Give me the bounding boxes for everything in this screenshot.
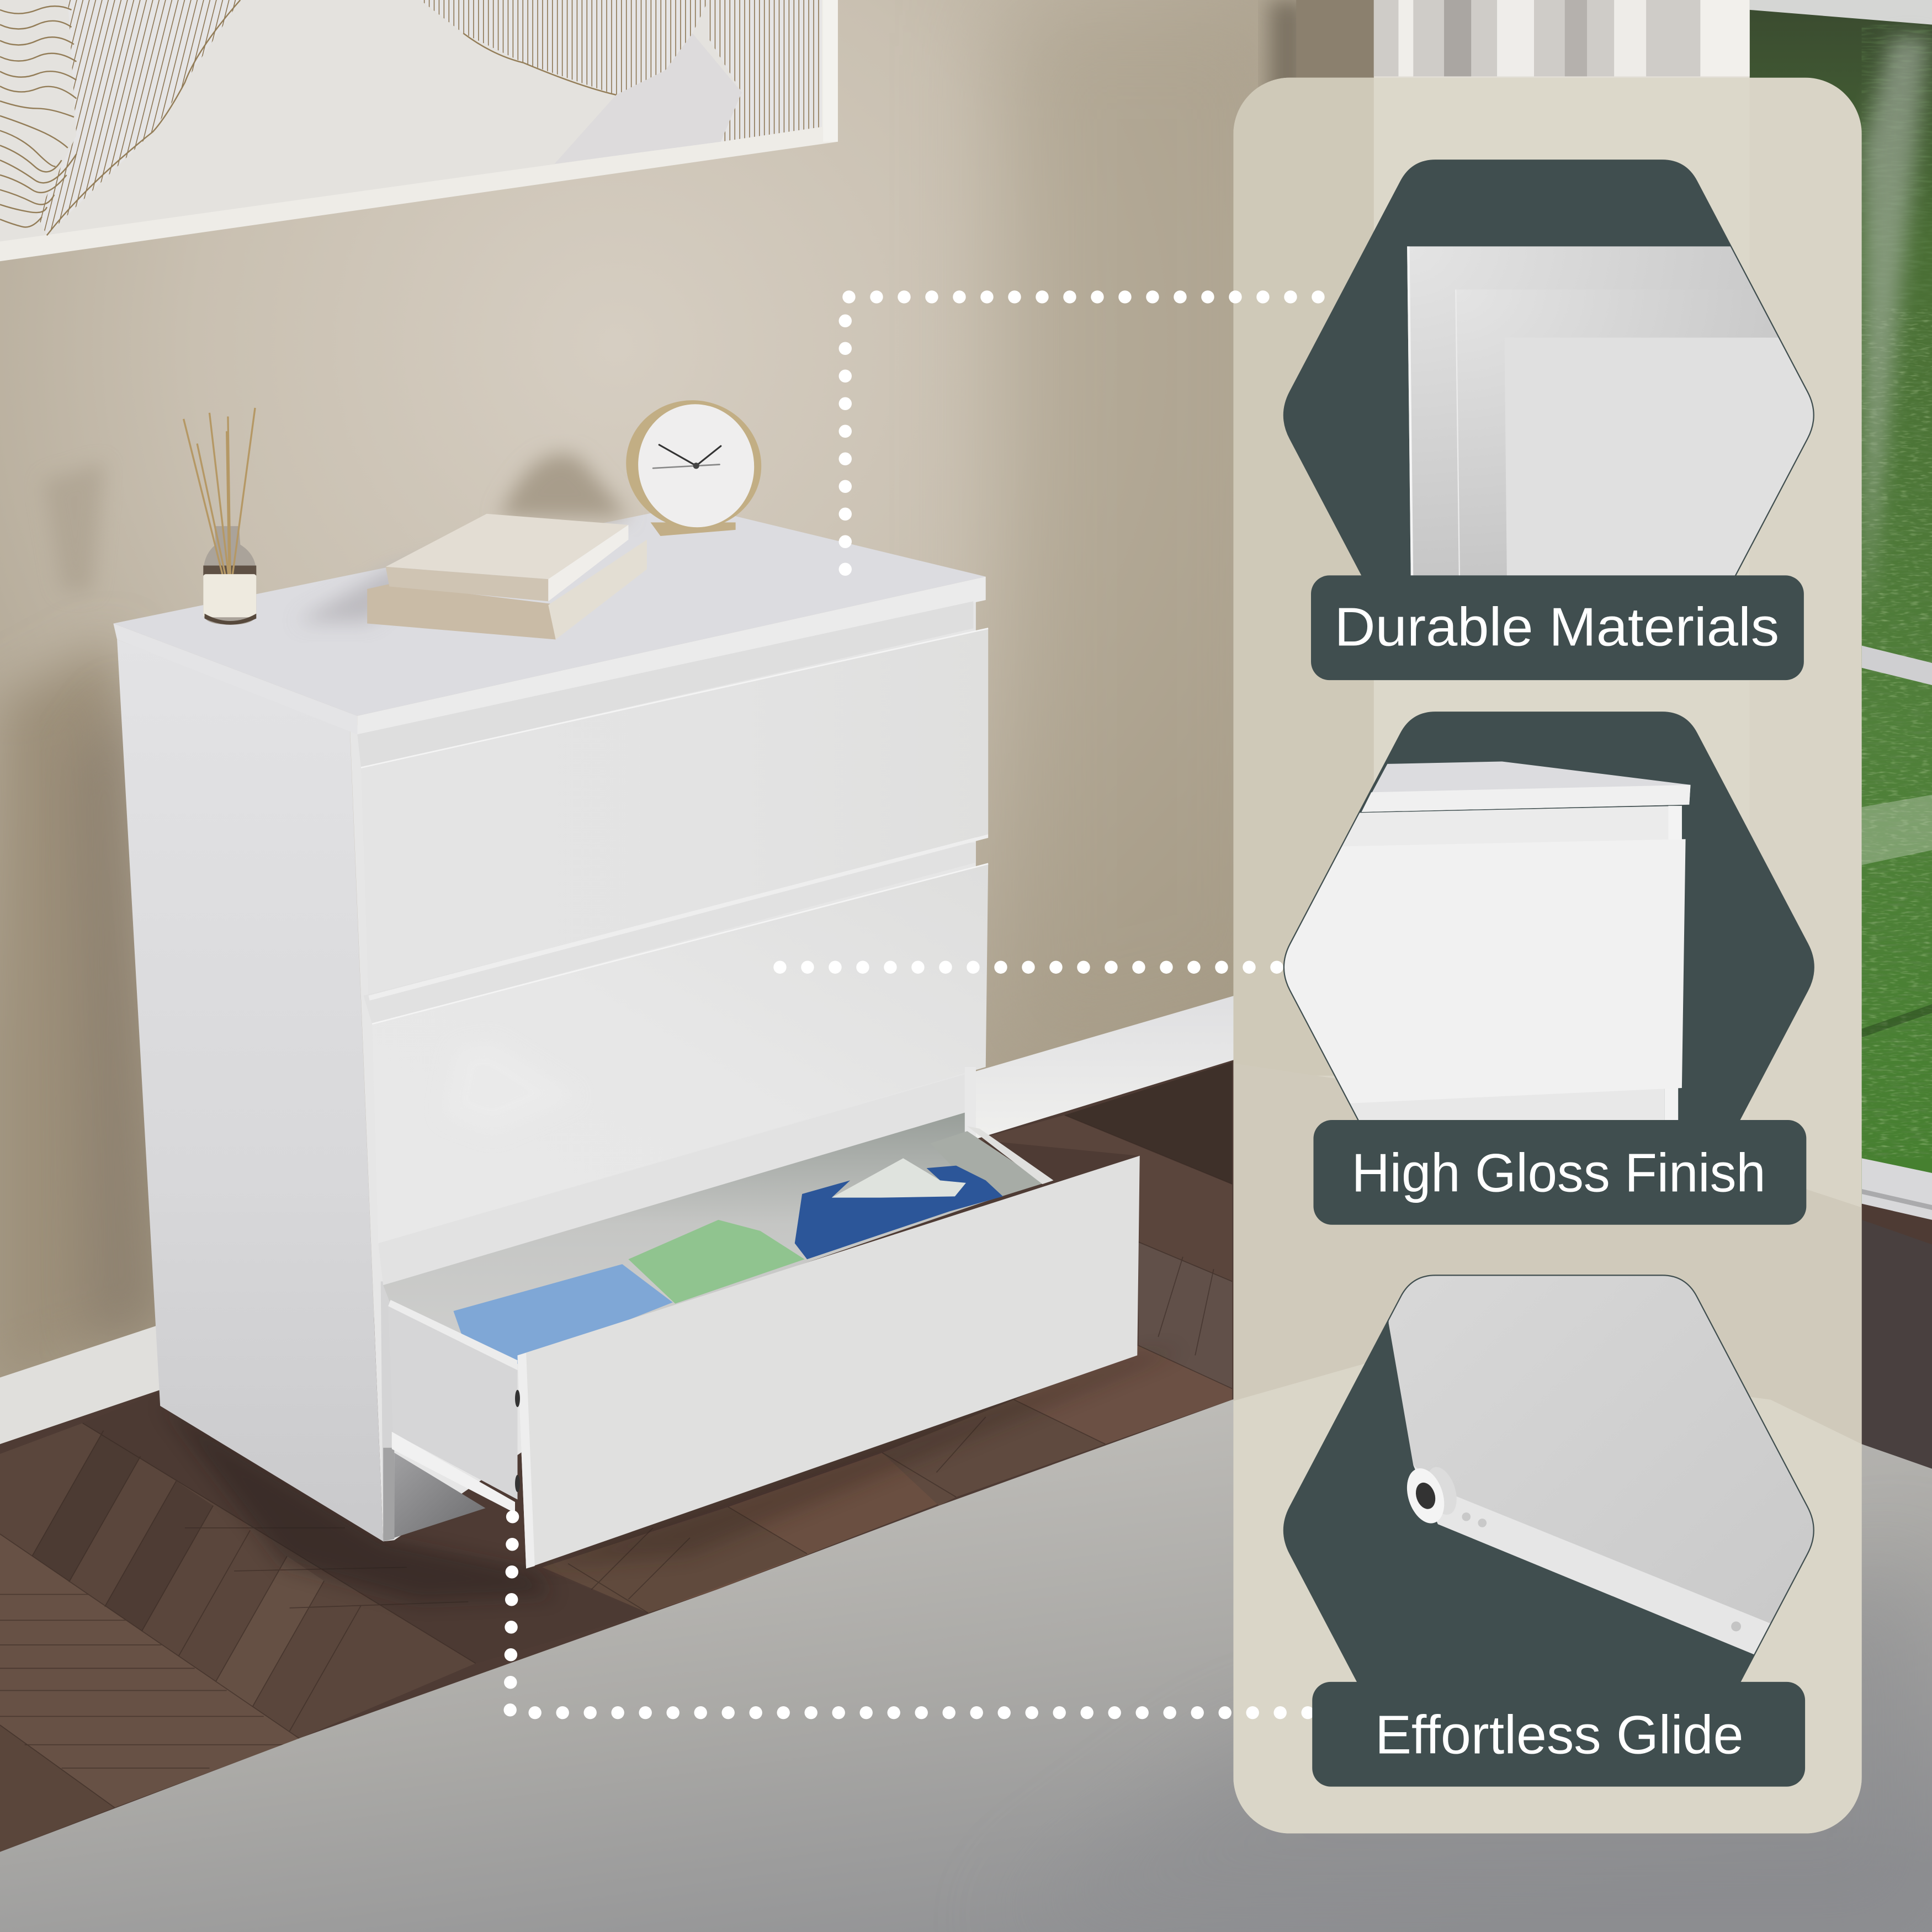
wooden parquet floor [0, 1060, 1932, 1932]
room background: wall [0, 0, 1932, 1479]
recess under open drawer [394, 1453, 485, 1538]
clothes: jeans [453, 1264, 673, 1364]
band beneath dresser [83, 1392, 648, 1663]
chest of drawers [113, 505, 1140, 1569]
label: durable materials: Durable Materials [1334, 597, 1779, 657]
top surface [113, 505, 986, 716]
dotted callout line: effortless glide [510, 1517, 1312, 1713]
label: effortless glide: Effortless Glide [1375, 1704, 1743, 1765]
clothes: blue sweater [795, 1166, 1003, 1259]
feature hexagon: effortless glide [1283, 1275, 1814, 1682]
front post shadow strip [381, 1281, 394, 1541]
rail below middle drawer [378, 1074, 965, 1285]
curtain [1374, 0, 1750, 1183]
clothes: white shirt [832, 1158, 966, 1214]
soft grey area in artwork [554, 33, 742, 164]
gloss reflection on middle drawer [444, 1041, 579, 1134]
open drawer front panel [518, 1156, 1140, 1569]
drawer right rim [967, 1126, 1053, 1184]
label: high gloss finish: High Gloss Finish [1352, 1142, 1766, 1203]
strip beneath top [357, 601, 973, 768]
steep chevron band [0, 1423, 476, 1739]
feature hexagon: high gloss finish [1283, 712, 1814, 1120]
area rug [0, 1352, 1932, 1932]
dotted callout line: durable materials [845, 297, 1326, 569]
left line-art region [37, 0, 240, 235]
dresser decor: wall shadows [43, 454, 628, 622]
stacked books [367, 514, 647, 639]
right line-art region [420, 0, 708, 95]
framed wall art [0, 0, 838, 261]
reed diffuser [184, 408, 256, 625]
dresser side panel [117, 639, 383, 1541]
floor tiles right of dresser [542, 1507, 807, 1613]
right post [965, 1067, 976, 1141]
window with garden view [1750, 0, 1932, 1244]
skirting boards [0, 996, 1235, 1444]
horizontal chevron band [0, 1534, 299, 1808]
desk clock [614, 388, 773, 542]
label: effortless glide [1312, 1682, 1805, 1787]
dresser cast shadow [160, 1402, 554, 1602]
open drawer inner right wall [930, 1131, 1045, 1201]
label: high gloss finish [1313, 1120, 1806, 1225]
under-drawer runner [392, 1432, 515, 1513]
feature panel background [1233, 78, 1862, 1833]
recessed rail below first drawer [363, 843, 976, 1024]
lower corner band [0, 1725, 115, 1852]
top drawer [361, 628, 988, 996]
top front edge [357, 577, 986, 734]
drawer cast shadow on right floor [530, 1349, 1183, 1567]
clothes: green shirt [628, 1220, 805, 1304]
middle drawer [372, 864, 988, 1243]
label: durable materials [1311, 575, 1804, 680]
dresser front frame [350, 591, 976, 1541]
feature hexagon: durable materials [1283, 160, 1814, 575]
open drawer side panel [388, 1306, 518, 1500]
dotted callout line: high gloss finish [780, 964, 1281, 970]
open drawer interior back wall [383, 1113, 1033, 1362]
